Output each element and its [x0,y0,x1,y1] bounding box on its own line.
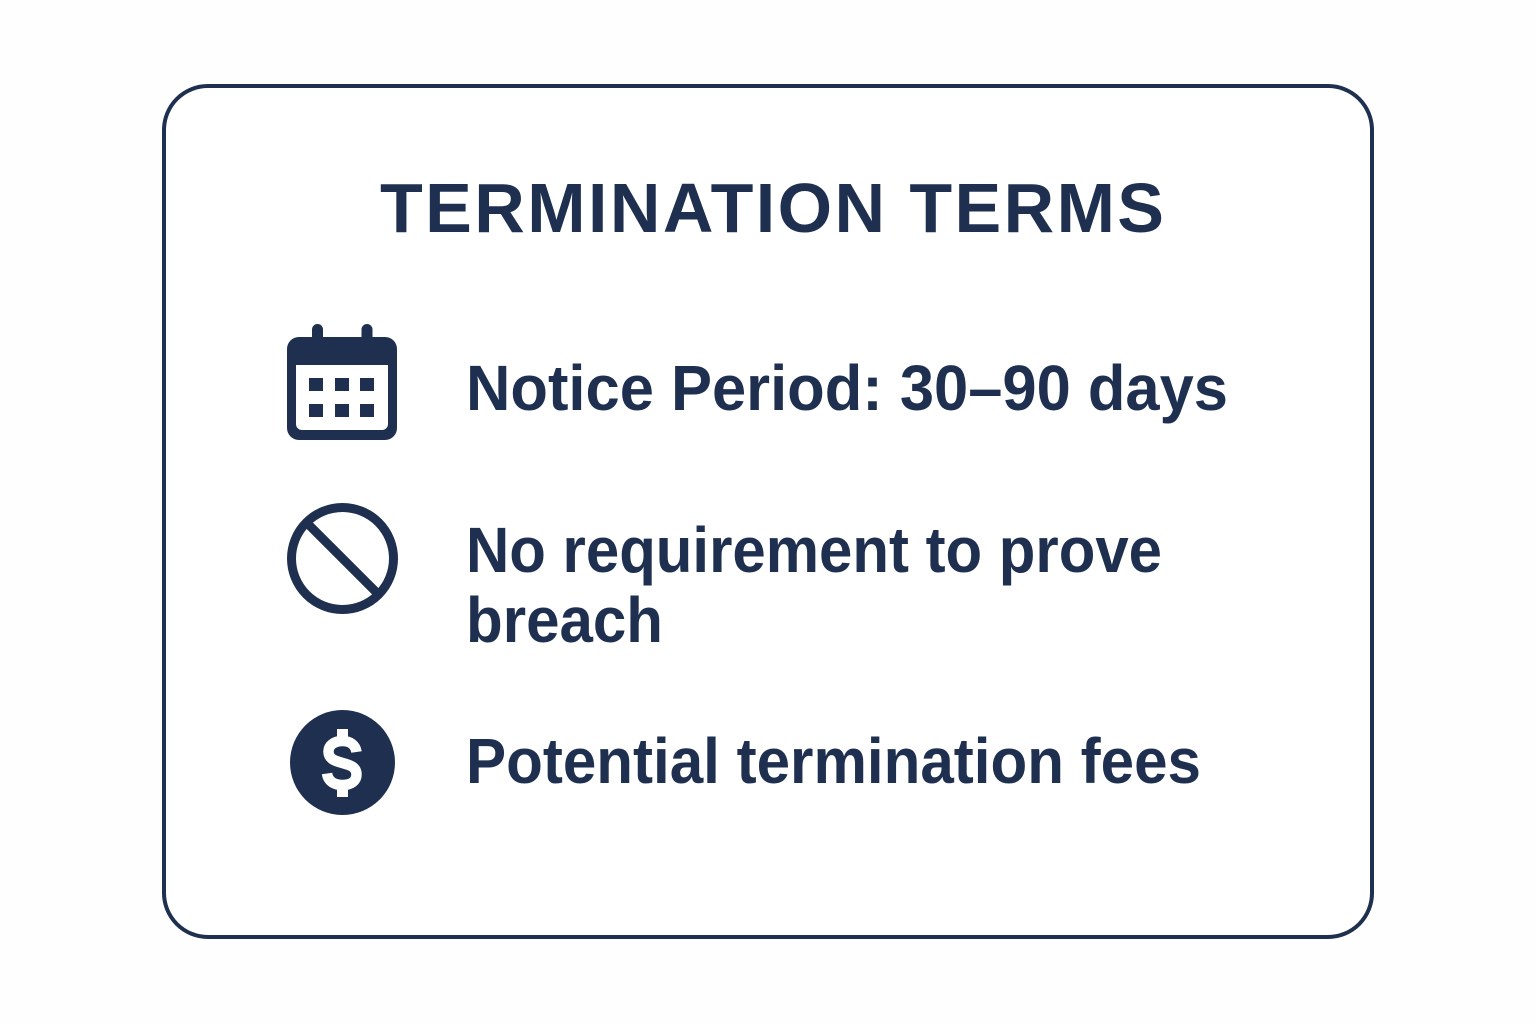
icon: prohibition sign [292,508,394,610]
text: notice period: Notice Period: 30–90 days [466,352,1228,424]
icon: calendar [287,324,397,440]
icon: dollar coin [290,710,395,815]
text: potential termination fees: Potential termination fees [466,725,1201,797]
title: TERMINATION TERMS [380,169,1164,247]
panel: termination terms card [164,86,1372,937]
text: no requirement to prove breach: breach [466,584,663,656]
text: no requirement to prove breach [466,514,1162,656]
text: no requirement to prove breach: No requirement to prove [466,514,1162,586]
